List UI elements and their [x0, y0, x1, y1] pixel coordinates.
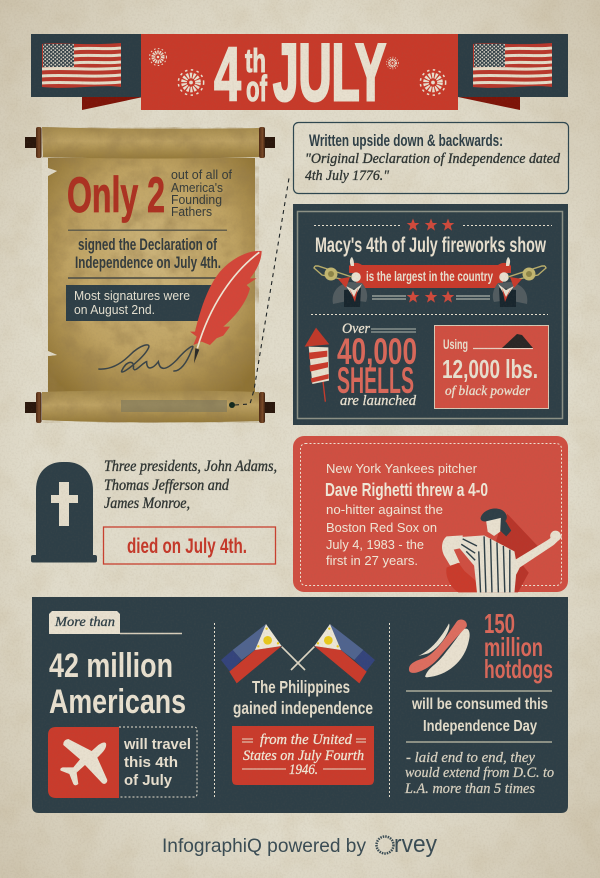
icon: fireworks — [150, 49, 446, 95]
text: will travel: of July — [124, 772, 173, 789]
panel: parchment scroll — [25, 127, 275, 423]
red banner centre — [141, 34, 458, 110]
text: signed the declaration — [68, 230, 227, 279]
navy flag panels — [31, 34, 568, 97]
text: righetti: Boston Red Sox on — [326, 520, 437, 535]
heading: philippines: The Philippines — [252, 677, 350, 697]
text: righetti — [325, 461, 488, 568]
icon: american flags — [42, 43, 552, 88]
stat: 40,000 shells: are launched — [340, 393, 416, 409]
callout: died on july 4th: died on July 4th. — [127, 535, 247, 558]
title: th — [245, 42, 266, 79]
text: laid end to end — [404, 750, 554, 797]
stat: 150 million hotdogs: 150 — [484, 608, 515, 639]
red banner: largest in the country — [356, 265, 503, 288]
text: founding fathers: Fathers — [171, 204, 212, 219]
parchment sheet — [48, 158, 255, 392]
callout: most signatures: on August 2nd. — [74, 303, 155, 317]
icon: orvey logo — [376, 836, 394, 854]
panel: dave righetti — [293, 436, 568, 592]
icon: tombstone — [31, 462, 97, 562]
section: hotdogs — [404, 608, 554, 797]
text: righetti: July 4, 1983 - the — [326, 537, 424, 552]
stat: 40,000 shells: SHELLS — [337, 360, 414, 401]
title: JULY — [273, 28, 386, 118]
panel: macy's fireworks — [293, 204, 568, 425]
icon: trumpeters — [314, 257, 546, 307]
text: will be consumed — [406, 691, 552, 742]
section: philippines — [221, 624, 375, 785]
scroll rolls — [42, 127, 259, 422]
red banner: largest in the country: is the largest in the country — [366, 268, 493, 284]
section: 42 million americans — [48, 611, 197, 798]
icon box: airplane — [48, 727, 119, 798]
callout: written upside down — [294, 122, 568, 194]
callout: died on july 4th — [104, 527, 276, 564]
text: righetti: Dave Righetti threw a 4-0 — [325, 480, 488, 500]
torn edge notches — [42, 158, 57, 392]
heading: americans: Americans — [49, 683, 186, 721]
lower stars — [372, 290, 490, 303]
icon: pitcher illustration — [442, 508, 562, 592]
parchment texture — [42, 127, 259, 423]
callout: from the united states: States on July Fourth — [243, 748, 364, 764]
text: righetti: New York Yankees pitcher — [326, 461, 478, 476]
panel: bottom statistics — [32, 597, 568, 813]
tan bar and marker — [121, 400, 235, 412]
tag: more than: More than — [54, 615, 115, 630]
heading: philippines — [233, 677, 373, 718]
icon: signature — [98, 345, 193, 372]
text: laid end to end: - laid end to end, they — [406, 750, 536, 766]
callout: written upside down: Written upside down & backwards: — [309, 132, 503, 150]
stat: black powder: Using — [443, 336, 468, 352]
text: righetti: no-hitter against the — [326, 502, 443, 517]
stat: black powder: of black powder — [445, 384, 531, 399]
ribbon folds — [82, 97, 520, 110]
text: signed the declaration: signed the Declaration of — [78, 236, 217, 254]
icon: philippine flags — [221, 624, 375, 683]
callout: most signatures: Most signatures were — [74, 289, 190, 303]
text: presidents: Three presidents, John Adams, — [104, 458, 277, 475]
dashed connector — [235, 178, 289, 405]
icon: hotdog — [409, 620, 470, 677]
top dotted rules and stars — [311, 218, 552, 314]
stat: 150 million hotdogs — [484, 608, 553, 684]
header banner — [31, 28, 568, 118]
icon: feather quill — [190, 251, 262, 363]
text: will travel: will travel — [123, 736, 191, 753]
stat: black powder — [434, 326, 548, 408]
icon: rocket — [305, 328, 329, 402]
heading: 42 million: 42 million — [49, 647, 173, 685]
callout: written upside down: "Original Declaration of Independence dated — [305, 151, 560, 167]
text: will be consumed: Independence Day — [423, 718, 537, 735]
text: laid end to end: L.A. more than 5 times — [404, 781, 535, 797]
stat: black powder: 12,000 lbs. — [442, 354, 538, 384]
footer credit — [162, 831, 437, 858]
stat: 40,000 shells: 40,000 — [337, 331, 417, 372]
title: of — [246, 68, 268, 109]
stat: 40,000 shells: Over — [342, 321, 370, 337]
text: will be consumed: will be consumed this — [411, 696, 548, 713]
callout: from the united states — [232, 726, 374, 785]
scroll handles — [25, 127, 275, 423]
footer credit: rvey — [394, 831, 437, 858]
text: presidents: James Monroe, — [104, 495, 190, 512]
title: 4 — [214, 32, 241, 117]
callout: written upside down: 4th July 1776." — [305, 168, 390, 184]
heading: philippines: gained independence — [233, 698, 373, 718]
text: righetti: first in 27 years. — [326, 553, 418, 568]
footer credit: InfographiQ powered by — [162, 836, 366, 857]
callout: from the united states: 1946. — [289, 762, 318, 778]
text: will travel — [119, 727, 197, 797]
callout: most signatures — [66, 285, 218, 321]
icon: powder pile — [502, 334, 533, 348]
text: founding fathers — [171, 167, 232, 219]
text: presidents — [104, 458, 277, 512]
callout: from the united states: from the United — [260, 732, 352, 748]
tag: more than — [49, 611, 182, 634]
panel: three presidents — [31, 458, 277, 564]
text: founding fathers: out of all of — [171, 167, 232, 182]
stat: 150 million hotdogs: hotdogs — [484, 654, 553, 684]
text: presidents: Thomas Jefferson and — [104, 477, 229, 494]
text: founding fathers: Founding — [171, 192, 222, 207]
text: signed the declaration: Independence on July 4th. — [75, 254, 221, 272]
text: will travel: this 4th — [124, 754, 178, 771]
text: founding fathers: America's — [171, 180, 223, 195]
title — [214, 28, 386, 118]
heading: only 2: Only 2 — [67, 167, 165, 223]
stat: 40,000 shells — [337, 321, 417, 409]
stat: 150 million hotdogs: million — [484, 632, 543, 662]
text: laid end to end: would extend from D.C. to — [405, 765, 554, 781]
